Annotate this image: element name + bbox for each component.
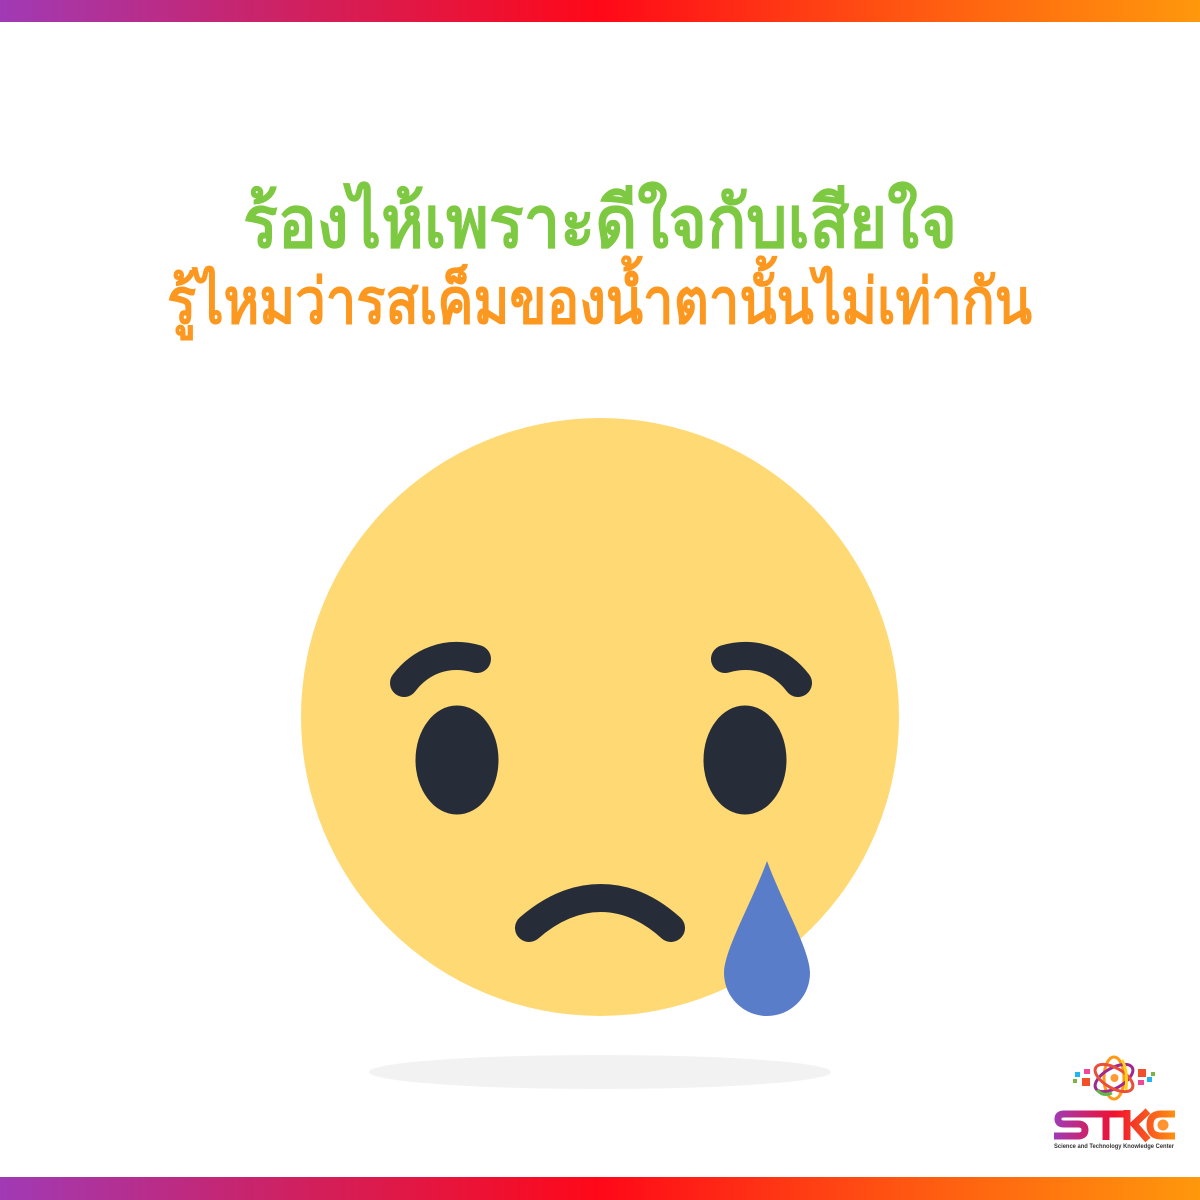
right eye [704, 706, 786, 814]
top gradient bar [0, 0, 1200, 22]
title line 1: ร้องไห้เพราะดีใจกับเสียใจ [243, 180, 957, 263]
face [301, 418, 899, 1016]
logo tagline: Science and Technology Knowledge Center [1054, 1144, 1175, 1150]
title [167, 180, 1032, 341]
tear drop [724, 861, 810, 1016]
logo pixels [1073, 1069, 1155, 1086]
mouth [529, 898, 671, 928]
right eyebrow [725, 656, 798, 683]
logo atom icon [1091, 1057, 1137, 1099]
left eye [416, 706, 498, 814]
logo wordmark [1054, 1110, 1175, 1140]
bottom gradient bar [0, 1177, 1200, 1200]
logo: STKC [1054, 1057, 1175, 1150]
title line 2: รู้ไหมว่ารสเค็มของน้ำตานั้นไม่เท่ากัน [167, 255, 1032, 341]
icon: crying emoji [301, 418, 899, 1089]
logo dot [1158, 1120, 1168, 1130]
left eyebrow [404, 656, 477, 683]
emoji shadow [369, 1055, 831, 1089]
